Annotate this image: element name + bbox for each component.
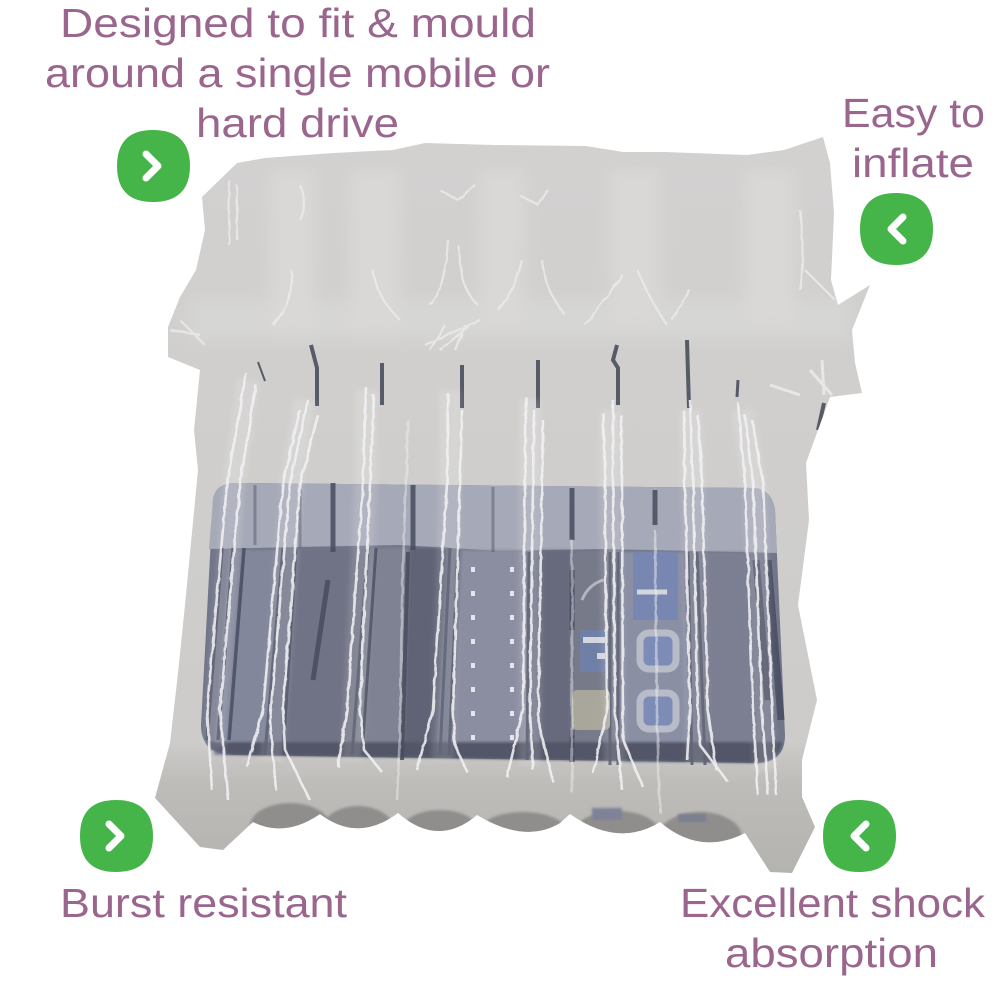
icon: right arrow button bottom left xyxy=(80,800,153,872)
phone dark stripes xyxy=(207,483,781,765)
heading: excellent shock absorption: Excellent shock xyxy=(680,880,986,926)
heading: excellent shock absorption: absorption xyxy=(725,930,938,976)
heading: burst resistant: Burst resistant xyxy=(60,880,348,926)
right flap crinkle xyxy=(770,360,832,395)
bottom pockets xyxy=(249,802,742,842)
upper tube shading xyxy=(273,187,790,326)
bag body xyxy=(155,137,870,873)
heading: easy to inflate: inflate xyxy=(852,140,974,186)
tube highlights xyxy=(207,373,776,813)
phone xyxy=(201,483,785,765)
heading: designed to fit xyxy=(45,0,550,146)
heading: designed to fit: around a single mobile or xyxy=(45,50,550,96)
dark marks at tube valves xyxy=(257,340,826,430)
soft column glare xyxy=(214,380,765,770)
heading: designed to fit: Designed to fit & mould xyxy=(60,0,536,46)
screen app icons xyxy=(633,552,678,620)
phone upper lighter band xyxy=(209,483,777,553)
icon: left arrow button top right xyxy=(860,193,933,265)
heading: excellent shock absorption xyxy=(680,880,986,976)
icon: right arrow button top left xyxy=(117,130,190,202)
phone tube tints xyxy=(206,548,782,763)
air cushion bag with phone xyxy=(155,137,870,873)
icon: left arrow button bottom right xyxy=(823,800,896,872)
upper highlights xyxy=(170,180,835,350)
pocket blue tints xyxy=(592,808,706,822)
heading: easy to inflate: Easy to xyxy=(842,90,985,136)
heading: easy to inflate xyxy=(842,90,985,186)
screen dots xyxy=(473,567,512,755)
heading: designed to fit: hard drive xyxy=(196,100,399,146)
